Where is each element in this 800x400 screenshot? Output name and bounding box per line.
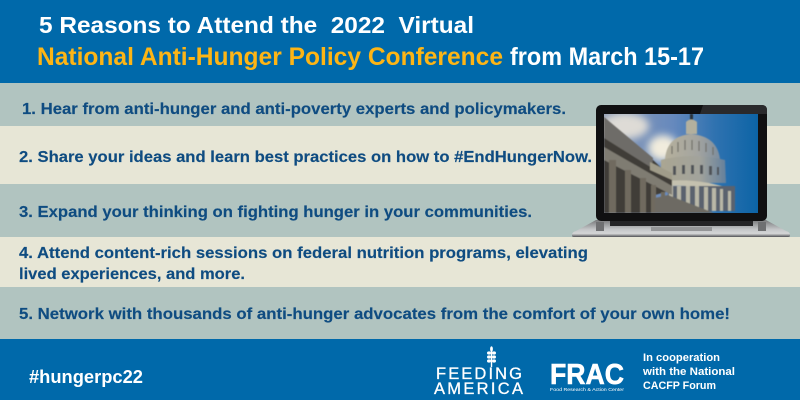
reason 2 band: 2. Share your ideas and learn best practices on how to #EndHungerNow. bbox=[19, 149, 592, 166]
reason 1 band: 1. Hear from anti-hunger and anti-poverty experts and policymakers. bbox=[22, 101, 566, 118]
title dates: from March 15-17 bbox=[510, 43, 704, 71]
title line 2: National Anti-Hunger Policy Conference bbox=[37, 43, 503, 71]
reason 1 band bbox=[0, 83, 800, 126]
reason 4 band bbox=[0, 237, 800, 287]
dome bbox=[690, 114, 693, 120]
title line 1: 5 Reasons to Attend the 2022 Virtual bbox=[39, 12, 474, 38]
hashtag: #hungerpc22 bbox=[29, 367, 143, 387]
reason 3 band bbox=[0, 184, 800, 237]
footer banner bbox=[0, 339, 800, 400]
header banner bbox=[0, 0, 800, 83]
reason 5 band bbox=[0, 287, 800, 339]
FRAC logo: FRAC bbox=[550, 359, 624, 391]
icon: wheat stalk bbox=[487, 346, 496, 367]
cooperation note: with the National bbox=[642, 366, 735, 378]
Feeding America logo bbox=[434, 346, 523, 398]
Capitol photo bbox=[601, 113, 758, 213]
FRAC logo: Food Research & Action Center bbox=[550, 387, 624, 393]
reason 2 band bbox=[0, 126, 800, 184]
reason 4 band: 4. Attend content-rich sessions on federal nutrition programs, elevating bbox=[19, 245, 588, 262]
cooperation note bbox=[642, 352, 735, 392]
Feeding America logo: FEEDING bbox=[436, 365, 522, 383]
Feeding America logo: AMERICA bbox=[434, 380, 523, 398]
Senate wing bbox=[604, 138, 672, 213]
cooperation note: In cooperation bbox=[643, 352, 720, 364]
reason 4 band: lived experiences, and more. bbox=[19, 266, 245, 283]
reason 3 band: 3. Expand your thinking on fighting hunger in your communities. bbox=[19, 204, 532, 221]
laptop lid bbox=[596, 105, 767, 221]
laptop with Capitol photo bbox=[572, 105, 790, 237]
reason 5 band: 5. Network with thousands of anti-hunger advocates from the comfort of your own home! bbox=[19, 306, 730, 323]
laptop base bbox=[572, 220, 790, 237]
cooperation note: CACFP Forum bbox=[643, 380, 716, 392]
